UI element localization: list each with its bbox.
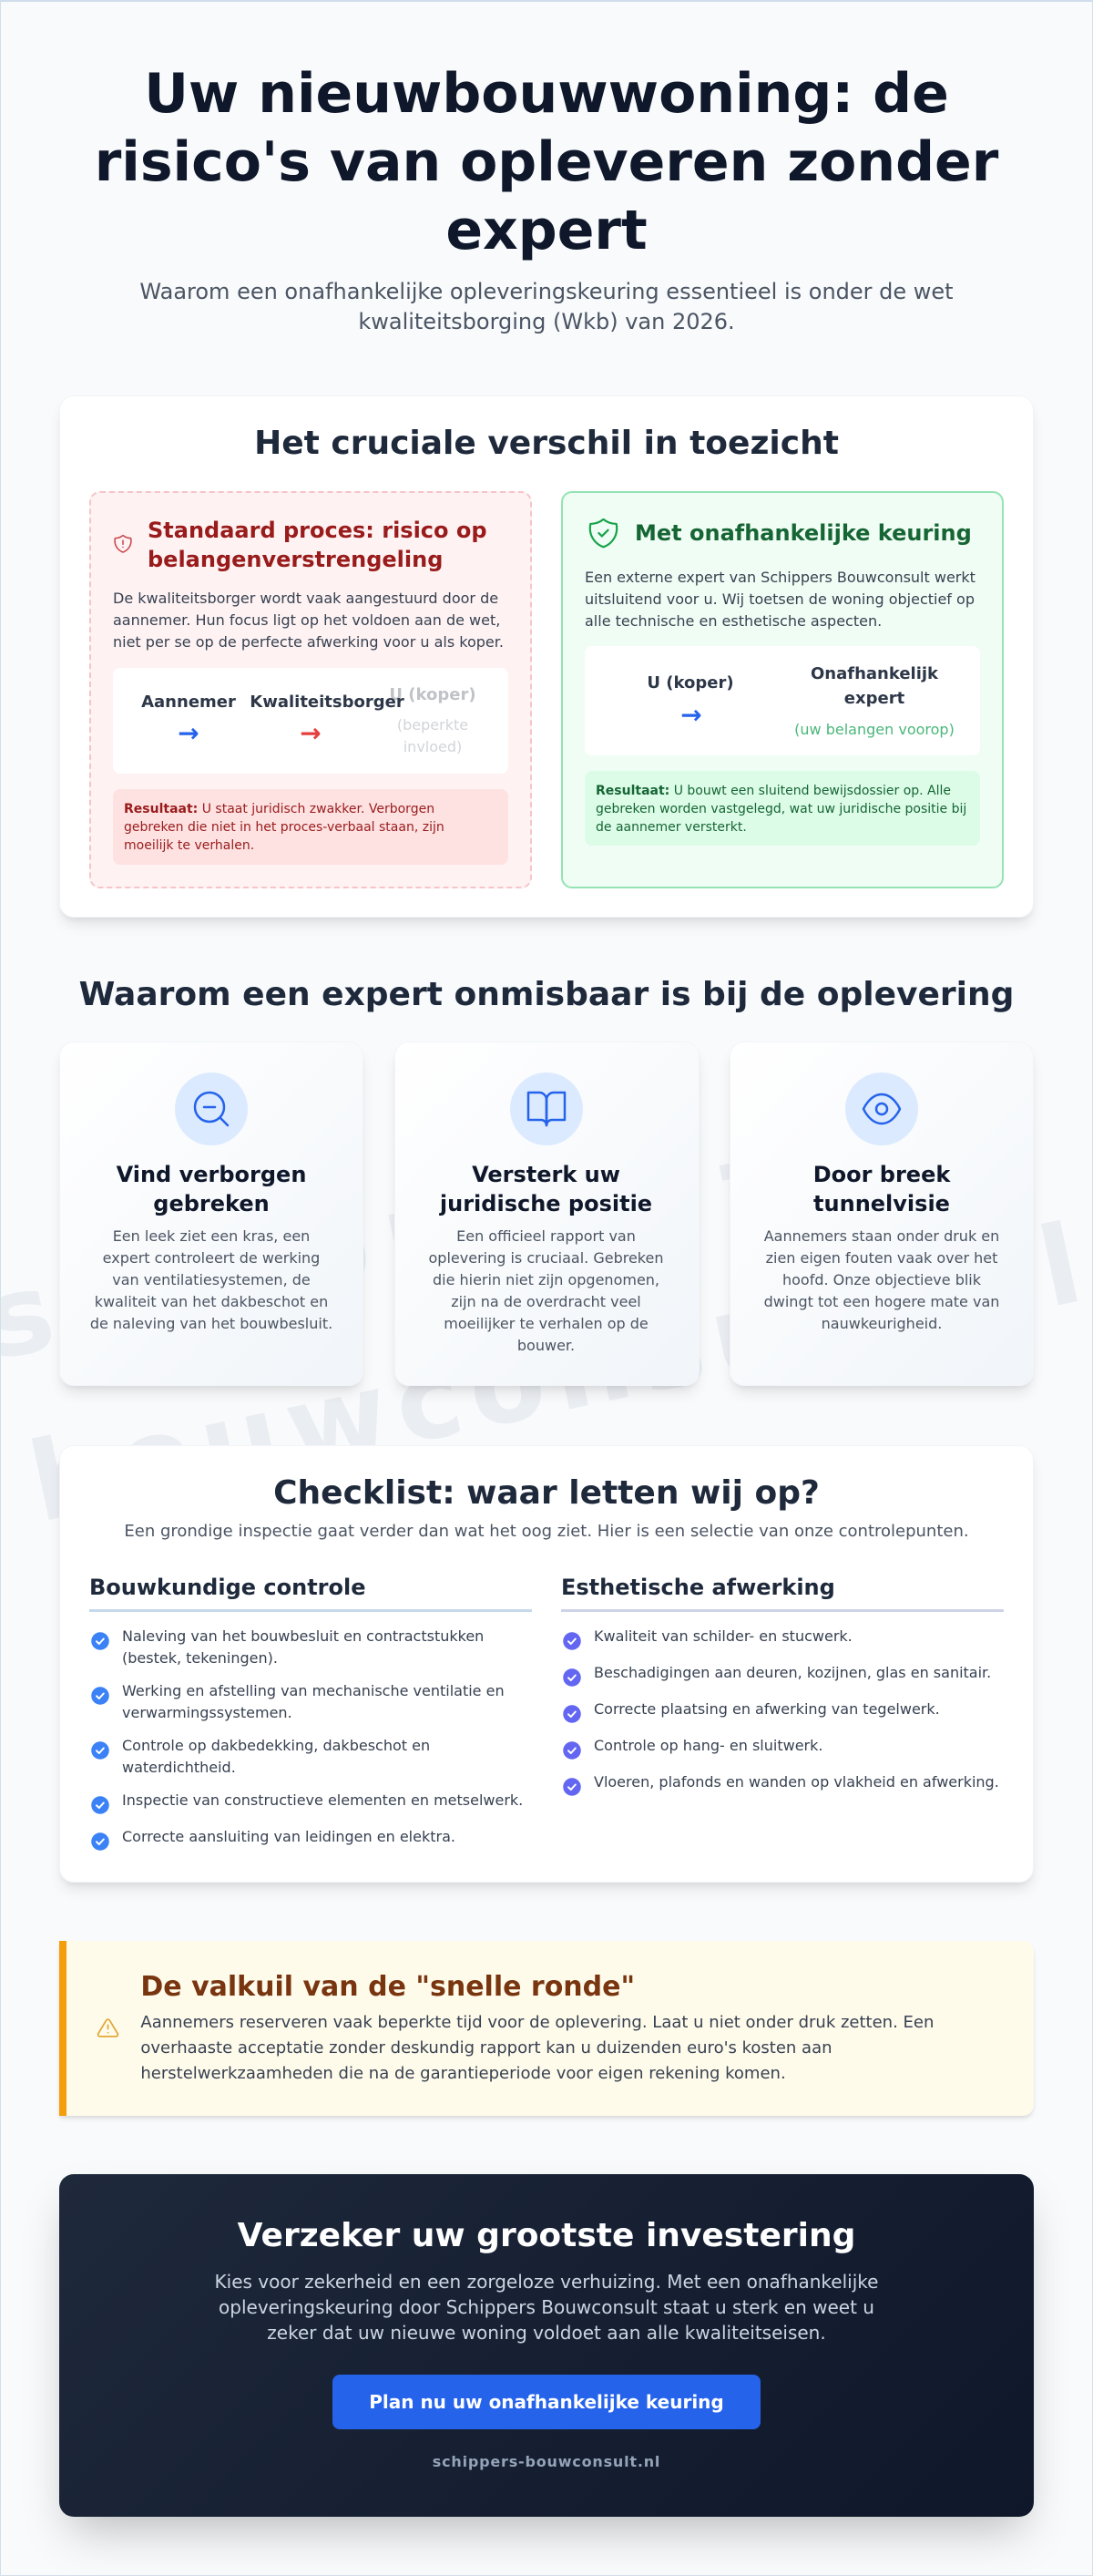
feature text: oplevering is cruciaal. Gebreken bbox=[429, 1248, 663, 1267]
label: koper: U (koper) bbox=[647, 673, 734, 693]
item 2: Werking en afstelling van mechanische ventilatie en bbox=[122, 1682, 505, 1699]
item 3: waterdichtheid. bbox=[122, 1759, 236, 1776]
label: expert bbox=[811, 664, 938, 708]
column heading: Bouwkundige controle bbox=[89, 1575, 366, 1600]
card title: Met onafhankelijke keuring bbox=[635, 520, 972, 546]
callout text: overhaaste acceptatie zonder deskundig rapport kan u duizenden euro's kosten aan bbox=[140, 2038, 833, 2058]
feature text: expert controleert de werking bbox=[103, 1248, 320, 1267]
feature title bbox=[117, 1162, 306, 1216]
arrow: blue: → bbox=[178, 718, 199, 748]
item 2: verwarmingssystemen. bbox=[122, 1704, 292, 1721]
card: juridische positie bbox=[393, 1042, 700, 1386]
feature title: tunnelvisie bbox=[813, 1191, 950, 1216]
item 2 bbox=[91, 1682, 505, 1721]
card text: Een externe expert van Schippers Bouwconsult werkt bbox=[585, 569, 976, 585]
item 1 bbox=[563, 1627, 853, 1650]
feature text: kwaliteit van het dakbeschot en bbox=[95, 1292, 328, 1310]
label: koper faded: U (koper) bbox=[389, 685, 476, 704]
feature title: Door breek bbox=[813, 1162, 950, 1187]
feature title: gebreken bbox=[153, 1191, 270, 1216]
label: koper faded: (beperkte bbox=[397, 716, 468, 734]
card title: belangenverstrengeling bbox=[148, 547, 443, 572]
feature title: Vind verborgen bbox=[117, 1162, 306, 1187]
label: aannemer: Aannemer bbox=[141, 693, 236, 712]
label: belangen voorop: (uw belangen voorop) bbox=[794, 721, 955, 738]
result box: green bbox=[585, 771, 980, 846]
callout text: Aannemers reserveren vaak beperkte tijd voor de oplevering. Laat u niet onder druk zetten. Een bbox=[140, 2013, 934, 2032]
feature title bbox=[439, 1162, 652, 1216]
subtitle: Waarom een onafhankelijke opleveringskeuring essentieel is onder de wet bbox=[139, 279, 954, 304]
card: onafhankelijke keuring bbox=[561, 491, 1004, 888]
item 5: Correcte aansluiting van leidingen en elektra. bbox=[122, 1828, 455, 1845]
feature text: bouwer. bbox=[517, 1336, 575, 1354]
item 3: Controle op dakbedekking, dakbeschot en bbox=[122, 1737, 430, 1754]
cta text: zeker dat uw nieuwe woning voldoet aan alle kwaliteitseisen. bbox=[267, 2322, 826, 2344]
item 3: Correcte plaatsing en afwerking van tegelwerk. bbox=[594, 1700, 940, 1718]
icon: magnifier bbox=[175, 1072, 248, 1145]
card text bbox=[113, 589, 504, 651]
label: expert: expert bbox=[844, 689, 904, 708]
icon: warning shield bbox=[114, 535, 132, 553]
feature text: moeilijker te verhalen op de bbox=[444, 1314, 649, 1332]
website: schippers-bouwconsult.nl bbox=[433, 2453, 660, 2469]
item 1: Kwaliteit van schilder- en stucwerk. bbox=[594, 1627, 853, 1645]
feature title bbox=[813, 1162, 951, 1216]
arrow: red: → bbox=[300, 718, 322, 748]
feature text: dwingt tot een hogere mate van bbox=[764, 1292, 999, 1310]
cta text: opleveringskeuring door Schippers Bouwconsult staat u sterk en weet u bbox=[219, 2296, 874, 2318]
heading: checklist: Checklist: waar letten wij op? bbox=[273, 1474, 820, 1512]
item 1 bbox=[91, 1627, 484, 1667]
panel: checklist bbox=[59, 1445, 1034, 1883]
card text: uitsluitend voor u. Wij toetsen de woning objectief op bbox=[585, 590, 975, 607]
title bbox=[95, 62, 998, 262]
diagram: koper to expert bbox=[585, 646, 980, 755]
feature title: juridische positie bbox=[440, 1191, 652, 1216]
item 4 bbox=[563, 1737, 822, 1760]
item 2: Beschadigingen aan deuren, kozijnen, glas en sanitair. bbox=[594, 1664, 991, 1681]
diagram: aannemer to koper bbox=[113, 668, 508, 774]
card text: aannemer. Hun focus ligt op het voldoen aan de wet, bbox=[113, 611, 500, 629]
item 3 bbox=[91, 1737, 430, 1776]
feature text: van ventilatiesystemen, de bbox=[112, 1270, 311, 1288]
result box: red: moeilijk te verhalen. bbox=[124, 838, 254, 853]
watermark: bouwconsult.nl bbox=[19, 1199, 1093, 1547]
column: esthetische afwerking bbox=[561, 1575, 1004, 1796]
result box: red: Resultaat: U staat juridisch zwakker. Verborgen bbox=[124, 802, 434, 816]
feature text bbox=[429, 1226, 663, 1354]
item 4: Inspectie van constructieve elementen en metselwerk. bbox=[122, 1791, 523, 1809]
icon: warning triangle bbox=[97, 2018, 118, 2037]
panel: call to action bbox=[59, 2174, 1034, 2517]
item 4: Controle op hang- en sluitwerk. bbox=[594, 1737, 822, 1754]
title: Uw nieuwbouwwoning: de bbox=[144, 62, 949, 126]
title: risico's van opleveren zonder bbox=[95, 129, 998, 193]
card: tunnelvisie bbox=[730, 1042, 1034, 1386]
item 5: Vloeren, plafonds en wanden op vlakheid en afwerking. bbox=[594, 1773, 999, 1791]
feature text: zijn na de overdracht veel bbox=[451, 1292, 641, 1310]
label: expert: Onafhankelijk bbox=[811, 664, 938, 683]
icon: eye bbox=[845, 1072, 918, 1145]
subtitle: kwaliteitsborging (Wkb) van 2026. bbox=[358, 309, 735, 334]
result box: red bbox=[113, 789, 508, 865]
feature text: Een officieel rapport van bbox=[456, 1226, 636, 1245]
item 1: (bestek, tekeningen). bbox=[122, 1649, 278, 1667]
cta text bbox=[215, 2271, 878, 2344]
button: Plan nu uw onafhankelijke keuring bbox=[369, 2391, 724, 2413]
card: verborgen gebreken bbox=[59, 1042, 363, 1386]
icon: check shield bbox=[588, 518, 618, 549]
result box: red: gebreken die niet in het proces-verbaal staan, zijn bbox=[124, 820, 444, 835]
card text: De kwaliteitsborger wordt vaak aangestuurd door de bbox=[113, 589, 498, 607]
card title bbox=[148, 518, 487, 572]
feature text: de naleving van het bouwbesluit. bbox=[90, 1314, 332, 1332]
callout text: herstelwerkzaamheden die na de garantieperiode voor eigen rekening komen. bbox=[140, 2064, 786, 2083]
feature text: zien eigen fouten vaak over het bbox=[766, 1248, 997, 1267]
heading: toezicht: Het cruciale verschil in toezicht bbox=[254, 425, 839, 462]
feature text: nauwkeurigheid. bbox=[822, 1314, 942, 1332]
feature text: Een leek ziet een kras, een bbox=[113, 1226, 310, 1245]
cta heading: Verzeker uw grootste investering bbox=[238, 2217, 855, 2254]
heading: expert onmisbaar: Waarom een expert onmisbaar is bij de oplevering bbox=[79, 976, 1014, 1013]
label: koper faded bbox=[389, 685, 476, 755]
subtitle bbox=[139, 279, 954, 334]
icon: book bbox=[510, 1072, 583, 1145]
label: koper faded: invloed) bbox=[403, 738, 462, 755]
checklist intro: Een grondige inspectie gaat verder dan wat het oog ziet. Hier is een selectie van onze controlepunten. bbox=[124, 1522, 969, 1541]
feature text: die hierin niet zijn opgenomen, bbox=[433, 1270, 659, 1288]
feature title: Versterk uw bbox=[472, 1162, 620, 1187]
panel: het cruciale verschil bbox=[59, 395, 1034, 918]
cta text: Kies voor zekerheid en een zorgeloze verhuizing. Met een onafhankelijke bbox=[215, 2271, 878, 2293]
callout: snelle ronde bbox=[59, 1941, 1034, 2116]
title: expert bbox=[445, 199, 648, 262]
column: bouwkundige controle bbox=[89, 1575, 532, 1851]
card: standaard proces bbox=[89, 491, 532, 888]
feature text: hoofd. Onze objectieve blik bbox=[782, 1270, 981, 1288]
card text bbox=[585, 569, 976, 629]
result box: green: de aannemer versterkt. bbox=[596, 820, 747, 835]
result box: green: Resultaat: U bouwt een sluitend bewijsdossier op. Alle bbox=[596, 784, 951, 798]
label: kwaliteitsborger: Kwaliteitsborger bbox=[250, 693, 404, 712]
card title: Standaard proces: risico op bbox=[148, 518, 487, 543]
card text: niet per se op de perfecte afwerking voor u als koper. bbox=[113, 632, 504, 651]
card text: alle technische en esthetische aspecten. bbox=[585, 612, 882, 629]
result box: green: gebreken worden vastgelegd, wat uw juridische positie bij bbox=[596, 802, 966, 816]
callout title: De valkuil van de "snelle ronde" bbox=[140, 1971, 635, 2003]
arrow: blue: → bbox=[680, 700, 702, 730]
feature text bbox=[90, 1226, 332, 1332]
feature text bbox=[763, 1226, 999, 1332]
column heading: Esthetische afwerking bbox=[561, 1575, 835, 1600]
callout text bbox=[140, 2013, 934, 2083]
item 1: Naleving van het bouwbesluit en contractstukken bbox=[122, 1627, 484, 1645]
feature text: Aannemers staan onder druk en bbox=[764, 1226, 999, 1245]
button bbox=[332, 2375, 761, 2429]
